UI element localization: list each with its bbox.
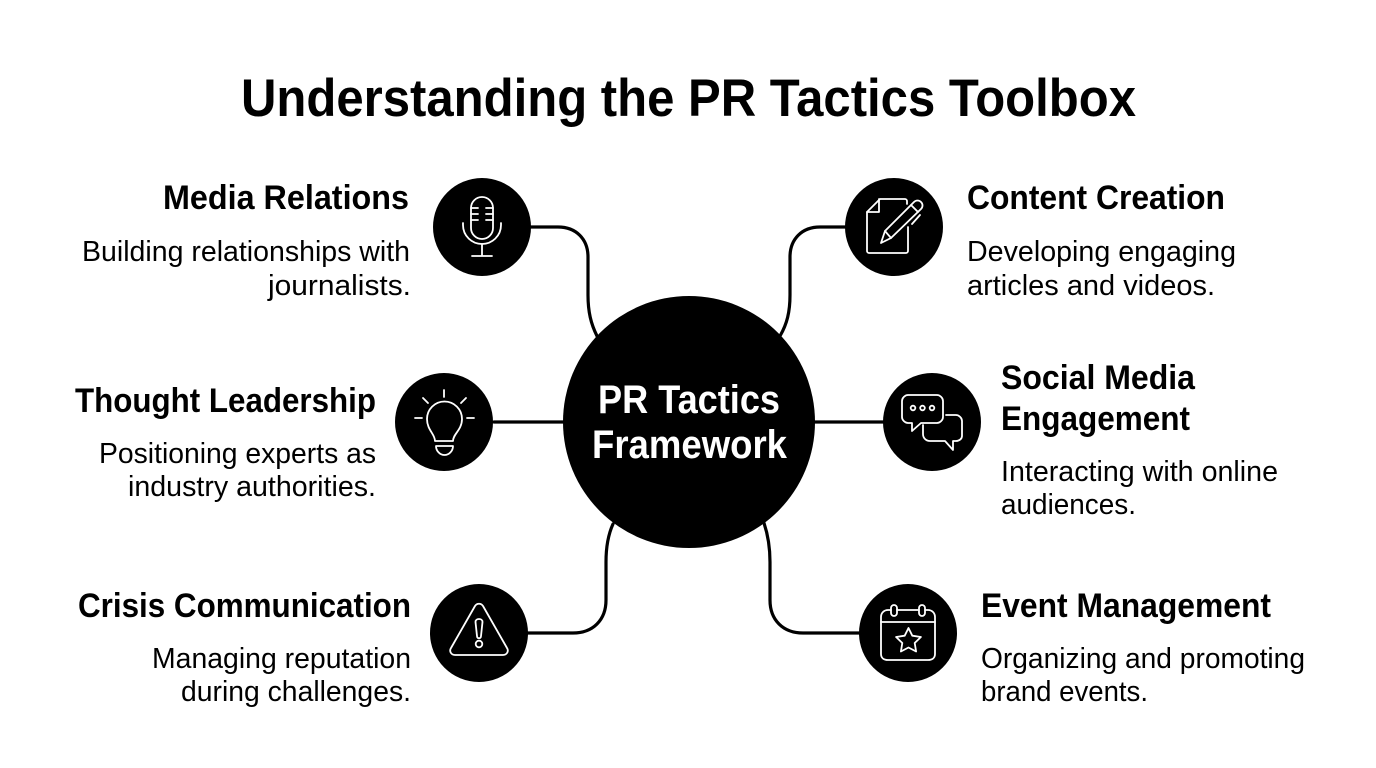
central hub: PR Tactics Framework: PR Tactics	[598, 378, 780, 422]
panel: media relations	[82, 178, 531, 302]
icon: calendar with star	[859, 584, 957, 682]
heading: thought leadership: Thought Leadership	[75, 382, 376, 420]
heading: social media engagement: Engagement	[1001, 400, 1190, 438]
panel: event management	[859, 584, 1305, 708]
central hub: PR Tactics Framework	[563, 296, 815, 548]
text: thought leadership description: Positioning experts as	[99, 438, 376, 470]
text: media relations description: journalists.	[267, 270, 411, 302]
text: crisis communication description: Managing reputation	[152, 643, 411, 675]
panel: content creation	[845, 178, 1236, 302]
title: Understanding the PR Tactics Toolbox	[241, 69, 1136, 128]
text: content creation description: articles and videos.	[967, 270, 1215, 302]
text: event management description: Organizing and promoting	[981, 643, 1305, 675]
heading: social media engagement	[1001, 359, 1196, 438]
heading: event management: Event Management	[981, 587, 1271, 625]
text: content creation description	[967, 236, 1236, 302]
text: social media description	[1001, 456, 1278, 521]
icon: microphone	[433, 178, 531, 276]
heading: crisis communication: Crisis Communication	[78, 587, 411, 625]
panel: crisis communication	[78, 584, 528, 708]
heading: social media engagement: Social Media	[1001, 359, 1196, 397]
panel: social media engagement	[883, 359, 1278, 521]
text: thought leadership description	[99, 438, 376, 503]
text: crisis communication description	[152, 643, 411, 708]
text: media relations description	[82, 236, 411, 302]
heading: content creation: Content Creation	[967, 179, 1225, 217]
heading: media relations: Media Relations	[163, 179, 409, 217]
icon: document and pen	[845, 178, 943, 276]
connectors	[494, 227, 884, 633]
text: thought leadership description: industry authorities.	[128, 471, 376, 503]
panel: thought leadership	[75, 373, 493, 503]
icon: warning triangle	[430, 584, 528, 682]
text: social media description: Interacting with online	[1001, 456, 1278, 488]
text: media relations description: Building relationships with	[82, 236, 410, 268]
text: crisis communication description: during challenges.	[181, 676, 411, 708]
text: event management description	[981, 643, 1305, 708]
text: event management description: brand events.	[981, 676, 1148, 708]
icon: chat bubbles	[883, 373, 981, 471]
text: content creation description: Developing engaging	[967, 236, 1236, 268]
text: social media description: audiences.	[1001, 489, 1136, 521]
central hub: PR Tactics Framework: Framework	[592, 423, 788, 467]
icon: light bulb	[395, 373, 493, 471]
